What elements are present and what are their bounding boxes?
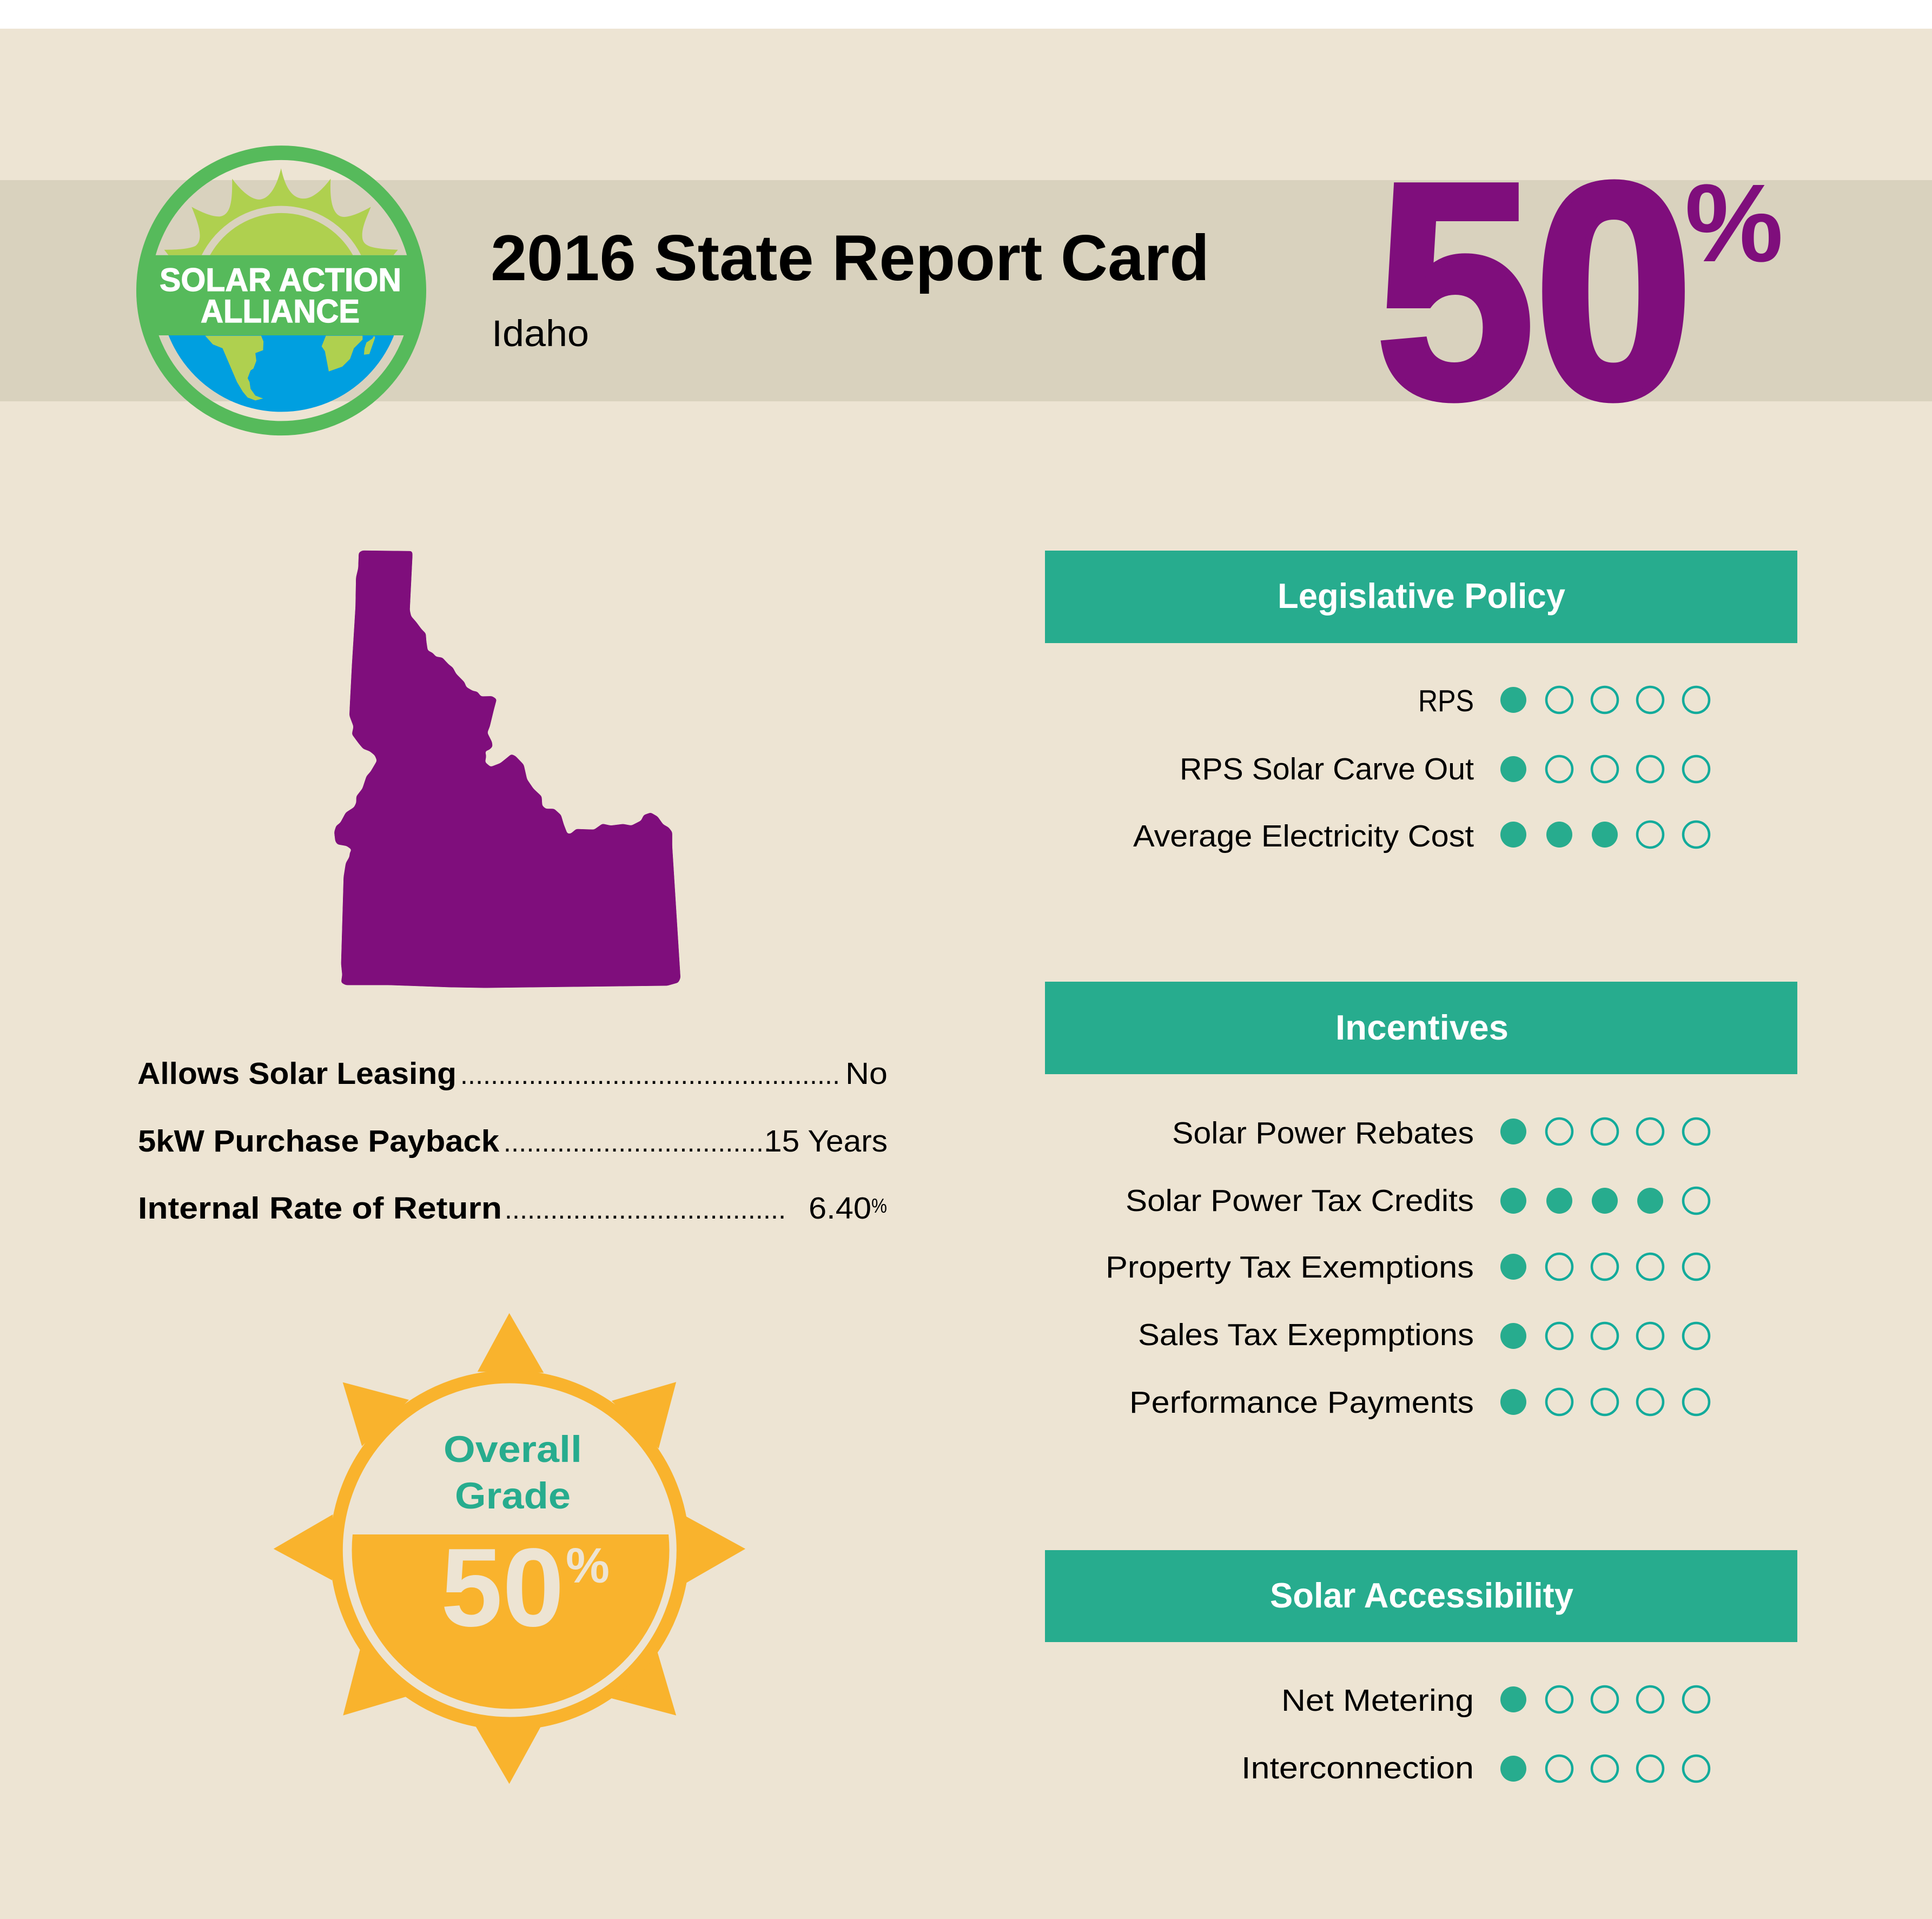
row: interconnection: Interconnection (1241, 1751, 1474, 1785)
heading: Incentives (1335, 1008, 1508, 1047)
stat: purchase payback: 5kW Purchase Payback (138, 1124, 499, 1159)
row: solar power rebates (1172, 1116, 1709, 1150)
logo green band (136, 255, 427, 335)
sun outer ring (336, 1377, 683, 1723)
panel: legislative policy (1045, 551, 1797, 853)
row: RPS: RPS (1418, 684, 1474, 718)
row: solar power tax credits: Solar Power Tax Credits (1126, 1183, 1474, 1218)
row: solar power rebates: Solar Power Rebates (1172, 1116, 1474, 1150)
row: average electricity cost: Average Electricity Cost (1133, 819, 1474, 853)
label: grade: Grade (455, 1475, 571, 1517)
logo name line 2: ALLIANCE (201, 293, 360, 329)
logo sun (164, 168, 398, 255)
stat: internal rate of return: 6.40 (809, 1191, 871, 1226)
row: performance payments: Performance Payments (1129, 1385, 1474, 1420)
big score (1376, 120, 1783, 461)
title: 2016 State Report Card (491, 222, 1209, 294)
panel: incentives (1045, 982, 1797, 1420)
stat: solar leasing (137, 1056, 888, 1091)
row: RPS solar carve out: RPS Solar Carve Out (1180, 752, 1474, 786)
label: overall: Overall (444, 1428, 582, 1470)
lower half fill (352, 1534, 670, 1709)
row: average electricity cost (1133, 819, 1709, 853)
stat: solar leasing: No (845, 1056, 888, 1091)
stat: internal rate of return: ..................................... (505, 1194, 786, 1225)
panel: solar accessibility (1045, 1550, 1797, 1785)
heading: Solar Accessibility (1270, 1576, 1573, 1615)
stat: purchase payback: 15 Years (764, 1124, 888, 1159)
logo name line 1: SOLAR ACTION (160, 262, 401, 298)
logo: Solar Action Alliance (136, 153, 427, 428)
row: property tax exemptions (1106, 1250, 1709, 1285)
row: sales tax exemptions: Sales Tax Exepmptions (1138, 1318, 1474, 1352)
sun rays (274, 1313, 745, 1784)
row: RPS (1418, 684, 1709, 718)
score number: 50 (1376, 120, 1693, 461)
row: solar power tax credits (1126, 1183, 1709, 1218)
header bar (1045, 551, 1797, 643)
row: sales tax exemptions (1138, 1318, 1709, 1352)
header bar (1045, 982, 1797, 1074)
score percent sign: % (1685, 161, 1783, 285)
stat: internal rate of return (138, 1191, 887, 1226)
row: RPS solar carve out (1180, 752, 1709, 786)
icon: Idaho map (334, 551, 680, 988)
stat: purchase payback: ................................... (504, 1127, 771, 1157)
logo ring (143, 153, 419, 428)
stat: solar leasing: .................................................. (460, 1060, 840, 1090)
row: property tax exemptions: Property Tax Exemptions (1106, 1250, 1474, 1285)
header bar (1045, 1550, 1797, 1642)
grade number: 50 (441, 1525, 564, 1650)
stat: purchase payback (138, 1124, 888, 1159)
row: net metering (1281, 1683, 1709, 1718)
row: net metering: Net Metering (1281, 1683, 1474, 1718)
logo artwork (136, 153, 427, 428)
stat: solar leasing: Allows Solar Leasing (137, 1056, 456, 1091)
grade percent sign: % (566, 1538, 610, 1593)
heading: Legislative Policy (1278, 576, 1565, 616)
row: interconnection (1241, 1751, 1709, 1785)
stats list (137, 1056, 888, 1226)
stat: internal rate of return: % (871, 1195, 887, 1217)
icon: overall grade sun badge (274, 1313, 745, 1784)
logo earth (169, 335, 394, 412)
row: performance payments (1129, 1385, 1709, 1420)
stat: internal rate of return: Internal Rate of Return (138, 1191, 502, 1226)
subtitle: state name: Idaho (492, 313, 589, 354)
header band (0, 180, 1932, 401)
